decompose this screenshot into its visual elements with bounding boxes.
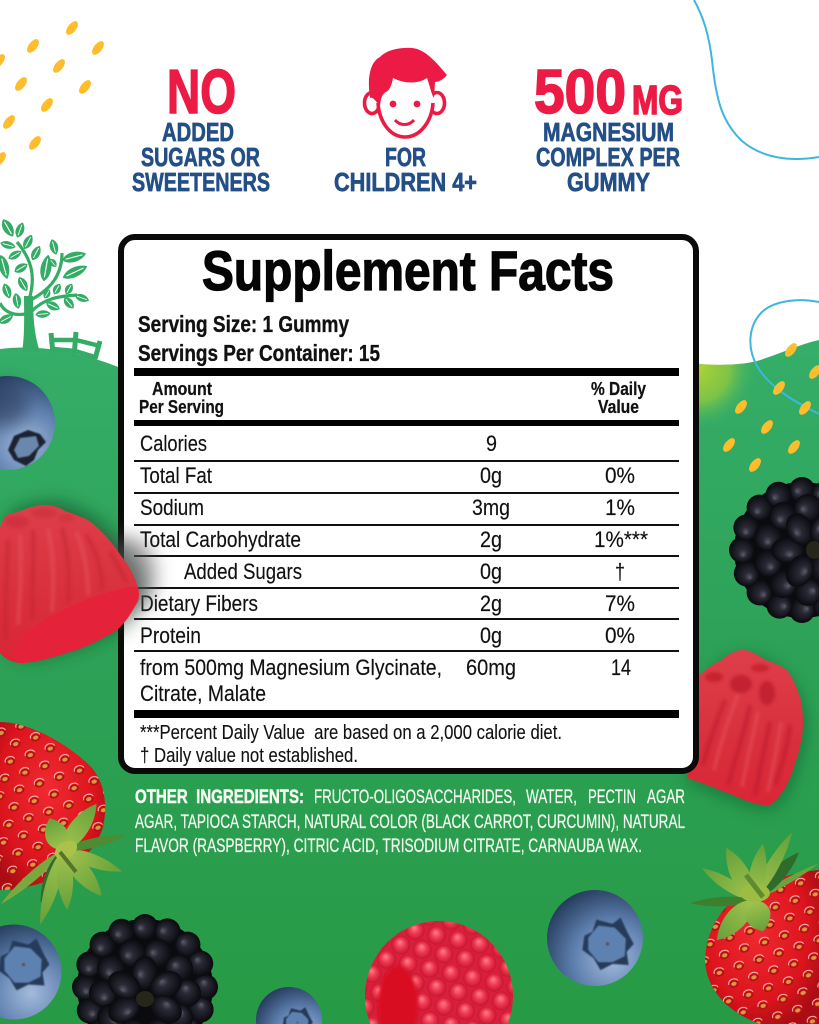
table rows: 14 [611,655,631,680]
fence icon [51,332,100,359]
footnotes: ***Percent Daily Value are based on a 2,000 calorie diet. [140,722,562,744]
table rows: Dietary Fibers [140,591,258,616]
table rows: 0% [605,623,635,648]
table rows: 2g [480,527,502,552]
claim: for children 4+: CHILDREN 4+ [334,167,477,197]
table header [139,379,646,417]
blueberry right [547,890,643,986]
other ingredients: FRUCTO-OLIGOSACCHARIDES, [314,787,516,808]
table rows: 0% [605,463,635,488]
table rows: Total Fat [140,463,212,488]
icon: boy face [364,48,447,137]
table rows: 0g [480,559,502,584]
table header: Amount [152,379,212,399]
table rows: from 500mg Magnesium Glycinate, [140,655,442,680]
blueberry small bottom [256,987,322,1024]
gummy left [0,505,139,663]
table header: Per Serving [139,397,224,417]
claim: 500mg magnesium [534,58,683,197]
claim: no added sugars: NO [167,58,236,127]
heading: supplement facts: Supplement Facts [202,239,614,302]
table rows: † [615,559,625,584]
table rows: 0g [480,463,502,488]
table rows: Protein [140,623,201,648]
table rows [134,431,679,706]
other ingredients: AGAR [647,787,685,808]
other ingredients: PECTIN [588,787,636,808]
lime highlight on hill [690,350,790,470]
table rows: 1%*** [594,527,648,552]
claim: no added sugars: SWEETENERS [132,167,270,197]
green hill background [0,340,819,1024]
blueberry bottom left [0,924,62,1020]
footnotes: † Daily value not established. [140,745,358,767]
claim: for children 4+ [334,48,477,197]
claim: 500mg magnesium: MAGNESIUM [543,117,674,147]
footnotes [140,722,562,767]
table rows: Citrate, Malate [140,681,266,706]
claim: no added sugars [132,58,270,197]
claim: 500mg magnesium: 500 [534,58,626,127]
blueberry left [0,376,55,470]
serving info: Servings Per Container: 15 [138,340,380,366]
table rows: 3mg [472,495,510,520]
table rows: Sodium [140,495,204,520]
claim: 500mg magnesium: COMPLEX PER [536,142,680,172]
table rows: 60mg [466,655,516,680]
gummy left shadow [7,503,156,659]
raspberry bottom [365,921,513,1024]
table rows: Total Carbohydrate [140,527,301,552]
strawberry left [0,722,128,927]
table header: % Daily [591,379,646,399]
other ingredients: OTHER INGREDIENTS: [135,787,304,808]
table rows: 9 [486,431,497,456]
claim: 500mg magnesium: GUMMY [567,167,650,197]
table rows: 7% [605,591,635,616]
table header: Value [598,397,639,417]
blue curve top right [694,0,819,159]
strawberry right [690,829,819,1024]
blackberry right [729,477,819,623]
table rows: 0g [480,623,502,648]
claim: for children 4+: FOR [385,142,426,172]
table rows: Added Sugars [184,559,302,584]
gummy right [685,650,805,808]
table rows: 1% [605,495,635,520]
strawberry leaves left [0,798,128,927]
strawberry leaves right [690,829,819,947]
table rows: 2g [480,591,502,616]
blue curve right [750,300,819,414]
claim: 500mg magnesium: MG [632,77,683,123]
tree icon [0,217,90,352]
serving info [138,311,380,366]
claim: no added sugars: SUGARS OR [141,142,260,172]
serving info: Serving Size: 1 Gummy [138,311,349,337]
claim: no added sugars: ADDED [162,117,234,147]
blackberry bottom [72,914,218,1024]
decorative yellow seeds top left [0,19,106,168]
decorative yellow seeds right [721,341,819,474]
table rows: Calories [140,431,207,456]
panel: supplement facts [121,237,696,771]
other ingredients: FLAVOR (RASPBERRY), CITRIC ACID, TRISODIUM CITRATE, CARNAUBA WAX. [135,836,642,857]
other ingredients [135,787,685,857]
other ingredients: WATER, [526,787,577,808]
